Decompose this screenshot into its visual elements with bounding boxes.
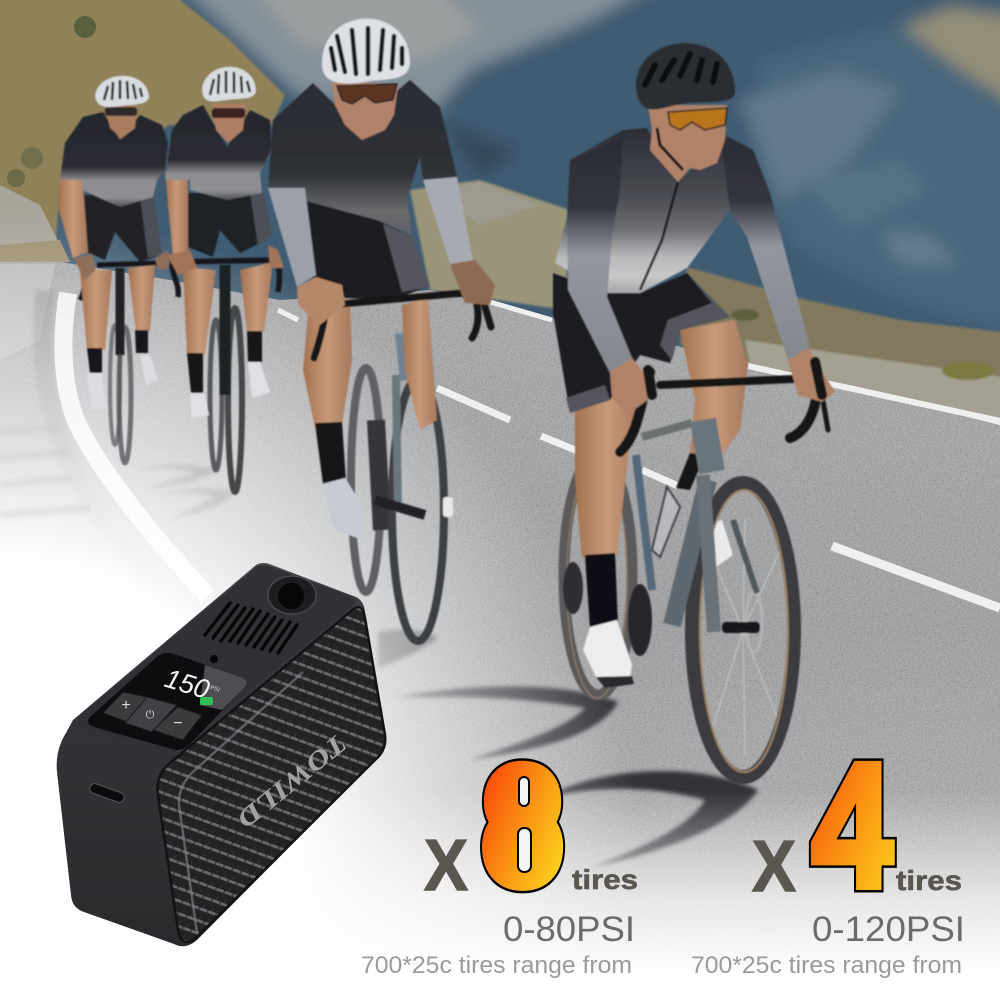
cyclist: far left	[58, 76, 170, 463]
tire size note: 700*25c tires range from	[691, 952, 962, 979]
top face	[77, 565, 355, 753]
battery icon	[200, 697, 213, 705]
hands	[610, 348, 835, 414]
left hillside	[0, 0, 285, 268]
buttons	[103, 692, 202, 740]
unit tires: tires	[896, 865, 962, 896]
background mountains	[0, 0, 1000, 380]
road surface	[0, 262, 1000, 955]
arm second	[165, 172, 188, 257]
cyclist: third	[268, 18, 495, 641]
vent slots	[205, 603, 297, 653]
water bottle	[652, 487, 680, 557]
jersey second	[165, 105, 272, 200]
arm far left	[58, 172, 88, 258]
jersey third	[268, 80, 457, 235]
chin strap	[657, 128, 683, 170]
jersey zipper	[640, 182, 678, 290]
face second	[212, 104, 246, 143]
glasses far left	[105, 107, 137, 116]
bike second	[170, 260, 280, 492]
helmet	[636, 43, 735, 109]
jersey far left	[60, 112, 168, 207]
usb-c port	[88, 782, 126, 804]
legs second	[183, 267, 216, 355]
near leg front rider	[575, 375, 640, 558]
left sleeve	[567, 137, 632, 373]
glasses second	[212, 108, 245, 118]
shorts far left	[78, 193, 162, 262]
shorts second	[188, 192, 272, 257]
bike rear wheel	[563, 455, 652, 698]
pressure range: 0-80PSI	[503, 910, 635, 949]
brake levers	[648, 362, 822, 395]
right roadside berm	[410, 180, 1000, 425]
buttons: −	[173, 715, 183, 732]
bike third	[351, 333, 444, 641]
bike front wheel	[692, 483, 794, 777]
display panel	[88, 653, 246, 750]
multiplier x: X	[424, 826, 468, 906]
legs far left	[80, 270, 112, 350]
number 4: 4	[812, 727, 892, 924]
carbon face	[158, 607, 385, 942]
hands second	[167, 250, 197, 275]
glasses third	[337, 84, 397, 104]
far leg front rider	[680, 320, 748, 455]
sensor dot	[210, 655, 218, 663]
shorts	[553, 273, 730, 413]
disc hub	[722, 622, 760, 633]
cyclist: front	[553, 43, 835, 777]
handlebars	[620, 365, 828, 452]
buttons: +	[121, 697, 131, 714]
number 8: 8	[491, 748, 554, 904]
product: tire inflator	[57, 563, 385, 946]
road shoulder shadow	[42, 290, 190, 640]
tire size note: 700*25c tires range from	[361, 952, 632, 979]
pressure range: 0-120PSI	[812, 910, 965, 949]
hands far left	[74, 250, 170, 280]
legs third	[303, 290, 352, 428]
helmet far left	[95, 76, 149, 107]
bike far left	[80, 262, 160, 463]
jersey	[555, 128, 770, 293]
bike frame	[636, 420, 757, 632]
psi unit: PSI	[209, 685, 221, 694]
carbon highlight curve	[179, 672, 303, 933]
face third	[332, 80, 398, 140]
road markings	[63, 293, 1000, 608]
neck and face	[648, 105, 727, 182]
helmet second	[202, 67, 256, 102]
nozzle	[268, 576, 316, 614]
number 8: 8	[491, 748, 554, 904]
arm warmers third	[268, 188, 316, 287]
handlebar third	[314, 293, 491, 358]
face far left	[105, 105, 137, 138]
number 4: 4	[812, 727, 892, 924]
multiplier x: X	[752, 827, 796, 907]
shorts third	[303, 200, 427, 300]
body silhouette	[57, 563, 385, 946]
right sleeve	[720, 133, 810, 360]
metric: 4 tires	[691, 727, 965, 979]
buttons: ⏻	[146, 708, 155, 721]
metric: 8 tires	[361, 748, 638, 979]
cyclist: second	[165, 67, 284, 492]
sunglasses	[668, 108, 727, 130]
helmet third	[322, 18, 410, 83]
hands third	[297, 277, 345, 325]
road shadows	[133, 465, 758, 868]
display digits: 150	[161, 663, 213, 705]
display gloss	[200, 665, 246, 710]
brand logo: TOWILD	[231, 728, 352, 834]
unit tires: tires	[572, 864, 638, 895]
